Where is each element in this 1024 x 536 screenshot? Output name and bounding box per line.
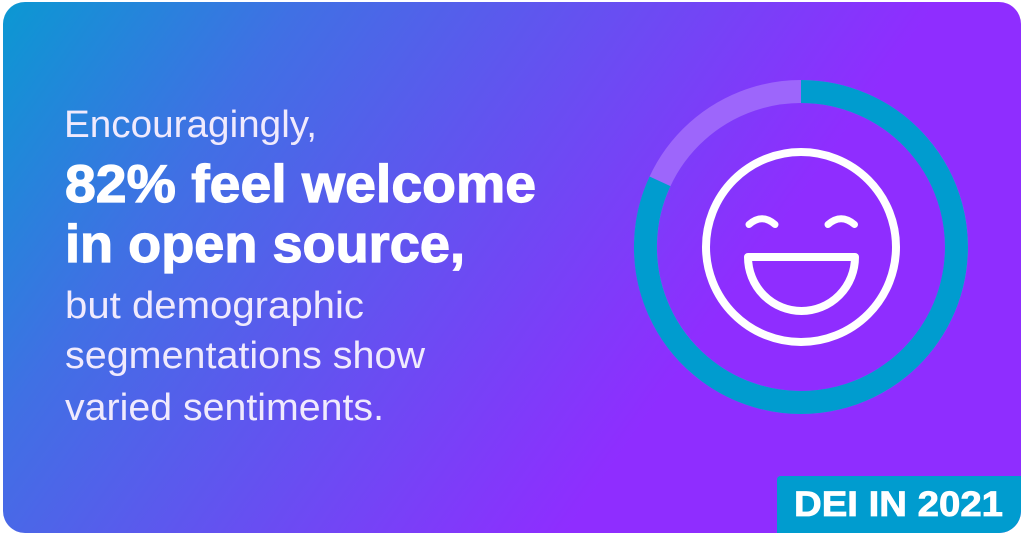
text: closing line three: varied sentiments. xyxy=(65,387,384,429)
text block: headline statement xyxy=(64,104,536,429)
heading: bold line two: in open source, xyxy=(65,215,465,274)
badge: DEI in 2021 xyxy=(777,476,1024,536)
icon: laughing smiley face xyxy=(706,152,896,342)
chart: 82 percent donut ring xyxy=(645,92,956,402)
text: closing line two: segmentations show xyxy=(65,335,426,377)
ring value: 82 percent xyxy=(645,92,956,402)
badge background xyxy=(777,476,1024,536)
ring track: remaining 18 percent xyxy=(646,92,956,402)
face outline xyxy=(706,152,896,342)
left eye xyxy=(749,219,775,224)
heading: bold line one: 82% feel welcome xyxy=(65,155,536,214)
badge label: DEI IN 2021 xyxy=(794,485,1003,524)
right eye xyxy=(828,219,854,224)
mouth xyxy=(748,257,855,311)
text: intro line: Encouragingly, xyxy=(64,104,317,146)
text: closing line one: but demographic xyxy=(65,285,364,327)
